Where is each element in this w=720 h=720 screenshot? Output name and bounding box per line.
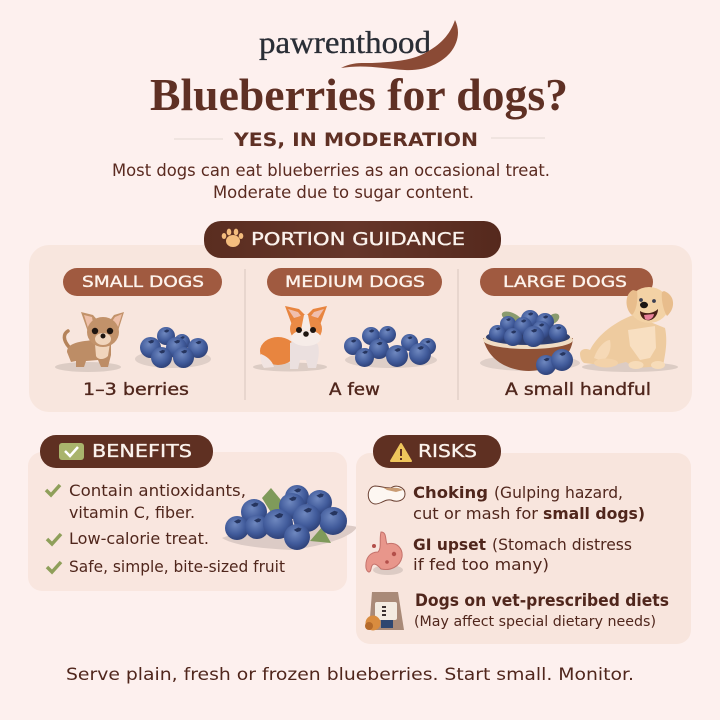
icon: small dog [55,312,124,372]
text: GI upset: GI upset [413,535,486,554]
benefits list: vitamin C, fiber. [69,503,195,522]
icon: choking bone [368,486,405,504]
panel: risks [356,435,691,644]
benefits list: Low-calorie treat. [69,529,209,548]
label: medium dogs: MEDIUM DOGS [285,272,425,291]
panel: benefits [28,435,357,591]
icon: small berries [135,327,211,368]
icon: bowl of berries [480,309,580,375]
benefits list: Contain antioxidants, [69,481,246,500]
label: small dogs [63,268,222,296]
text: small dog portion: 1–3 berries [83,380,189,400]
text: choking: cut or mash for [413,504,538,523]
heading: portion guidance [204,221,501,258]
logo [259,20,458,70]
icon: blueberries cluster [222,485,357,550]
label: small dogs: SMALL DOGS [82,272,204,291]
heading: portion guidance: PORTION GUIDANCE [251,229,465,250]
intro text [112,161,550,203]
text: vet diets: (May affect special dietary needs) [414,614,656,630]
text: choking: (Gulping hazard, [494,483,623,502]
label: large dogs [480,268,653,296]
text: GI upset [413,535,632,574]
text: GI upset: (Stomach distress [492,535,632,554]
text: vet diets [414,591,669,630]
footer: Serve plain, fresh or frozen blueberries. Start small. Monitor. [66,665,634,685]
text: choking [413,483,645,523]
intro text: Moderate due to sugar content. [213,183,474,203]
title: Blueberries for dogs? [150,70,568,120]
icon: food bag [365,592,404,630]
icon: stomach [366,532,403,575]
text: choking: small dogs) [543,504,645,523]
text: vet diets: Dogs on vet-prescribed diets [415,591,669,610]
logo: pawrenthood [259,24,431,60]
label: medium dogs [267,268,442,296]
icon: corgi [253,306,327,372]
subtitle: YES, IN MODERATION [233,129,478,151]
benefits list [46,481,285,576]
text: large dog portion: A small handful [505,380,651,400]
label: large dogs: LARGE DOGS [503,272,627,291]
text: choking: Choking [413,483,488,502]
text: GI upset: if fed too many) [413,555,549,574]
heading: benefits [40,435,213,468]
heading: benefits: BENEFITS [92,441,192,462]
intro text: Most dogs can eat blueberries as an occasional treat. [112,161,550,181]
icon: medium berries [344,326,437,368]
heading: risks: RISKS [418,441,477,462]
text: medium dog portion: A few [329,380,380,400]
benefits list: Safe, simple, bite-sized fruit [69,557,285,576]
icon: golden retriever [580,287,678,372]
panel: portion guidance [29,221,692,412]
heading: risks [373,435,501,468]
